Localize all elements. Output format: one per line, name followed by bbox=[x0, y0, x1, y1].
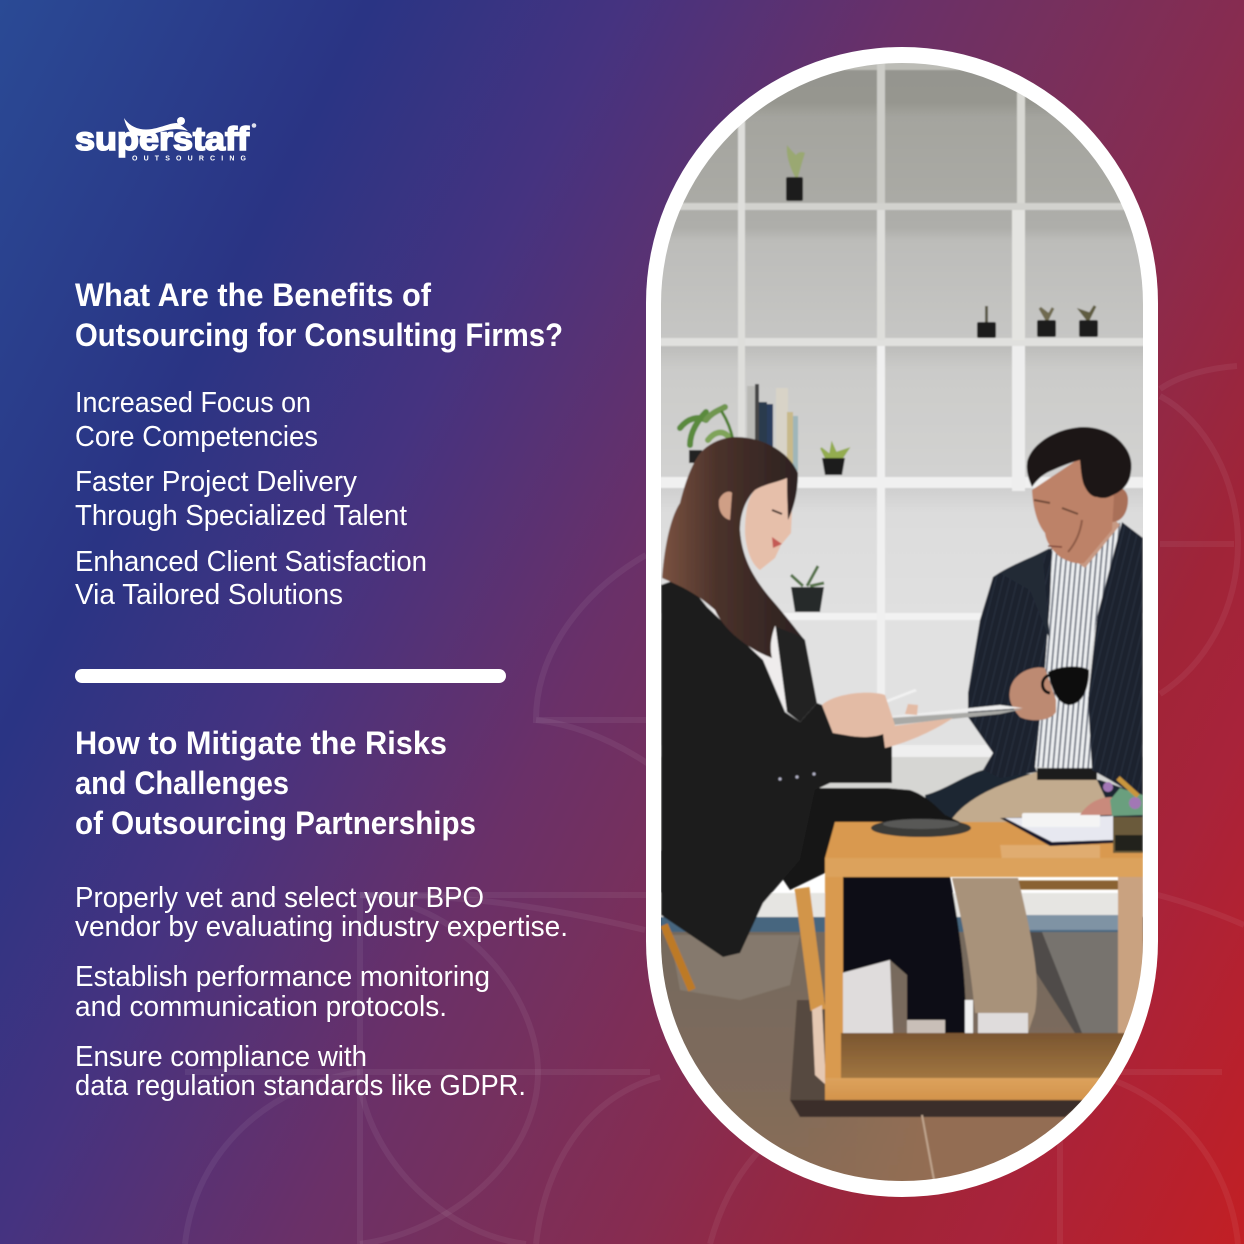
risk mitigation list bbox=[75, 882, 568, 1102]
woman: legs under table bbox=[843, 877, 966, 1033]
woman: lapel bbox=[774, 625, 818, 723]
risk mitigation list: vendor by evaluating industry expertise. bbox=[75, 911, 568, 943]
bookshelf wall bbox=[655, 60, 1150, 850]
benefits list bbox=[75, 387, 427, 611]
risk mitigation list: Ensure compliance with bbox=[75, 1041, 367, 1073]
benefits list: Core Competencies bbox=[75, 421, 318, 453]
background pattern bbox=[185, 366, 1244, 1244]
benefits list: Via Tailored Solutions bbox=[75, 579, 343, 611]
photo: consultant meeting bbox=[655, 60, 1150, 1187]
woman: white cloth and shoes bbox=[812, 960, 1028, 1085]
woman: hands bbox=[822, 693, 953, 748]
heading: risks: and Challenges bbox=[75, 765, 289, 801]
benefits list: Faster Project Delivery bbox=[75, 466, 357, 498]
logo: Superstaff Outsourcing: superstaff bbox=[75, 120, 250, 157]
risk mitigation list: Establish performance monitoring bbox=[75, 961, 490, 993]
coffee cup and man's hand bbox=[1009, 666, 1089, 720]
woman: shirt bbox=[712, 608, 786, 710]
white pill frame bbox=[646, 47, 1158, 1197]
woman: trousers bbox=[770, 788, 960, 890]
divider bar bbox=[75, 669, 506, 683]
risk mitigation list: and communication protocols. bbox=[75, 991, 447, 1023]
heading: risks bbox=[75, 725, 476, 841]
man: trousers and torso bbox=[925, 522, 1143, 830]
tablet and pen bbox=[887, 690, 1022, 726]
benefits list: Increased Focus on bbox=[75, 387, 311, 419]
jacket buttons bbox=[778, 772, 816, 780]
heading: benefits: What Are the Benefits of bbox=[75, 277, 431, 313]
heading: benefits bbox=[75, 277, 563, 353]
floor and rugs bbox=[655, 893, 1150, 1187]
risk mitigation list: data regulation standards like GDPR. bbox=[75, 1070, 526, 1102]
heading: benefits: Outsourcing for Consulting Firms? bbox=[75, 317, 563, 353]
man: lower body under table bbox=[952, 878, 1037, 1033]
man: head bbox=[1027, 427, 1131, 568]
table bbox=[825, 822, 1143, 1100]
woman: head and hair bbox=[662, 437, 803, 658]
benefits list: Through Specialized Talent bbox=[75, 500, 407, 532]
heading: risks: How to Mitigate the Risks bbox=[75, 725, 447, 761]
benefits list: Enhanced Client Satisfaction bbox=[75, 546, 427, 578]
woman: jacket bbox=[661, 577, 892, 957]
logo: Superstaff Outsourcing: OUTSOURCING bbox=[132, 156, 247, 162]
heading: risks: of Outsourcing Partnerships bbox=[75, 805, 476, 841]
shelf plants and books bbox=[680, 145, 1098, 612]
risk mitigation list: Properly vet and select your BPO bbox=[75, 882, 484, 914]
chair legs bbox=[664, 885, 1120, 1010]
table items bbox=[871, 778, 1143, 853]
